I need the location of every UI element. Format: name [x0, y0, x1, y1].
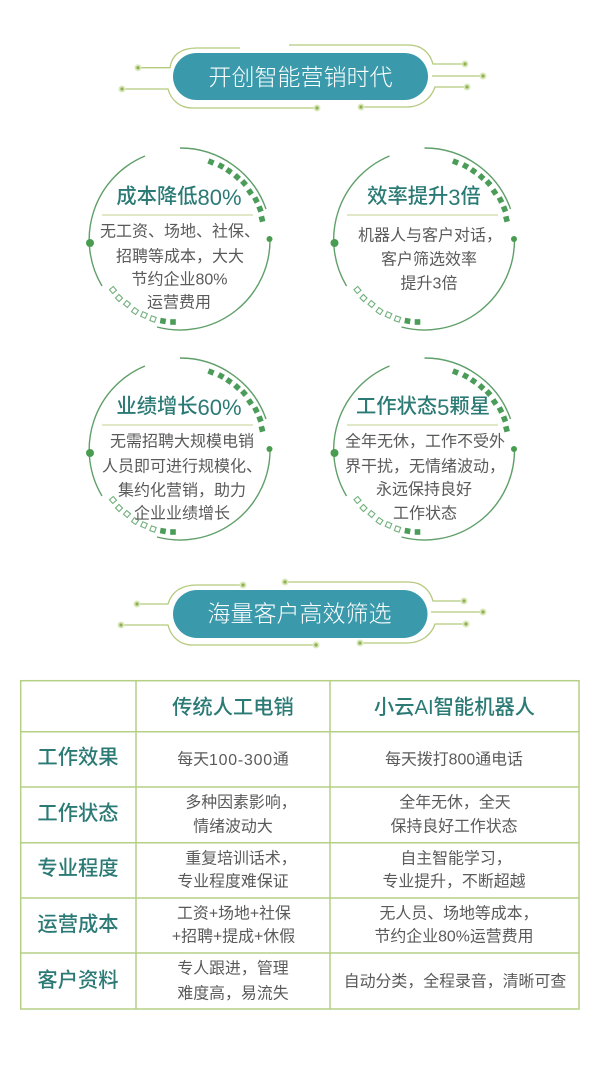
row: 客户资料: 难度高，易流失	[177, 984, 289, 1002]
body text: 无工资、场地、社保、	[100, 222, 260, 240]
top banner title: 开创智能营销时代	[208, 64, 392, 90]
row: 专业程度: 专业程度	[37, 857, 119, 880]
row: 客户资料	[37, 960, 566, 1002]
panel: 工作状态5颗星	[330, 358, 517, 540]
row: 运营成本	[37, 904, 538, 946]
ring decoration	[330, 148, 517, 330]
banner: 海量客户高效筛选	[118, 578, 486, 648]
row: 运营成本: 无人员、场地等成本，	[380, 904, 538, 922]
column header: 传统人工电销: 传统人工电销	[172, 696, 294, 719]
heading: 效率提升3倍	[367, 184, 481, 210]
body text	[102, 432, 262, 522]
body text	[100, 222, 260, 312]
body text	[358, 226, 502, 292]
body text: 招聘等成本，大大	[116, 248, 244, 266]
ring decoration	[86, 148, 272, 330]
body text: 人员即可进行规模化、	[102, 458, 262, 476]
row: 工作状态: 工作状态	[37, 802, 119, 825]
body text: 永远保持良好	[376, 480, 472, 498]
body text: 集约化营销，助力	[118, 482, 246, 500]
body text: 全年无休，工作不受外	[345, 432, 505, 450]
body text: 客户筛选效率	[381, 250, 477, 268]
body text	[345, 432, 505, 522]
body text: 机器人与客户对话，	[358, 226, 502, 244]
row: 专业程度: 专业程度难保证	[177, 872, 289, 890]
body text: 界干扰，无情绪波动，	[345, 458, 505, 476]
table grid	[21, 681, 579, 1009]
lower banner pill	[173, 590, 428, 638]
comparison table	[21, 681, 579, 1009]
body text: 工作状态	[393, 504, 457, 522]
row: 客户资料: 客户资料	[37, 969, 119, 992]
body text: 节约企业80%	[131, 270, 228, 288]
row: 工作效果: 每天100-300通	[177, 750, 289, 768]
row: 工作效果: 工作效果	[37, 746, 119, 769]
ring decoration	[330, 358, 517, 540]
row: 专业程度: 专业提升，不断超越	[382, 872, 526, 890]
row: 运营成本: 运营成本	[37, 913, 119, 936]
lower banner title: 海量客户高效筛选	[208, 600, 392, 626]
row: 客户资料: 自动分类，全程录音，清晰可查	[344, 972, 566, 990]
row: 工作状态: 全年无休，全天	[399, 794, 511, 812]
row: 工作效果	[37, 746, 523, 769]
heading: 工作状态5颗星	[356, 394, 490, 420]
heading: 成本降低80%	[116, 184, 242, 210]
body text: 运营费用	[147, 294, 211, 312]
row: 专业程度	[37, 850, 526, 890]
column header: 小云AI智能机器人: 小云AI智能机器人	[374, 696, 535, 719]
panel: 业绩增长60%	[86, 358, 272, 540]
row: 运营成本: +招聘+提成+休假	[172, 928, 295, 946]
row: 工作状态	[37, 794, 518, 836]
row: 客户资料: 专人跟进，管理	[177, 960, 289, 978]
circuit lines around lower banner	[118, 578, 486, 648]
row: 专业程度: 重复培训话术，	[185, 850, 297, 868]
body text: 提升3倍	[401, 274, 457, 292]
ring decoration	[86, 358, 272, 540]
row: 工作状态: 情绪波动大	[193, 818, 273, 836]
top banner pill	[173, 53, 428, 100]
panel: 成本降低80%	[86, 148, 272, 330]
circuit lines around top banner	[118, 45, 486, 112]
heading: 业绩增长60%	[116, 394, 242, 420]
body text: 无需招聘大规模电销	[110, 432, 254, 450]
banner: 开创智能营销时代	[118, 45, 486, 112]
panel: 效率提升3倍	[330, 148, 517, 330]
body text: 企业业绩增长	[134, 504, 230, 522]
row: 专业程度: 自主智能学习，	[400, 850, 512, 868]
row: 运营成本: 节约企业80%运营费用	[375, 928, 533, 946]
row: 工作状态: 保持良好工作状态	[390, 818, 518, 836]
row: 工作效果: 每天拨打800通电话	[385, 750, 523, 768]
row: 工作状态: 多种因素影响，	[185, 794, 297, 812]
row: 运营成本: 工资+场地+社保	[177, 904, 291, 922]
